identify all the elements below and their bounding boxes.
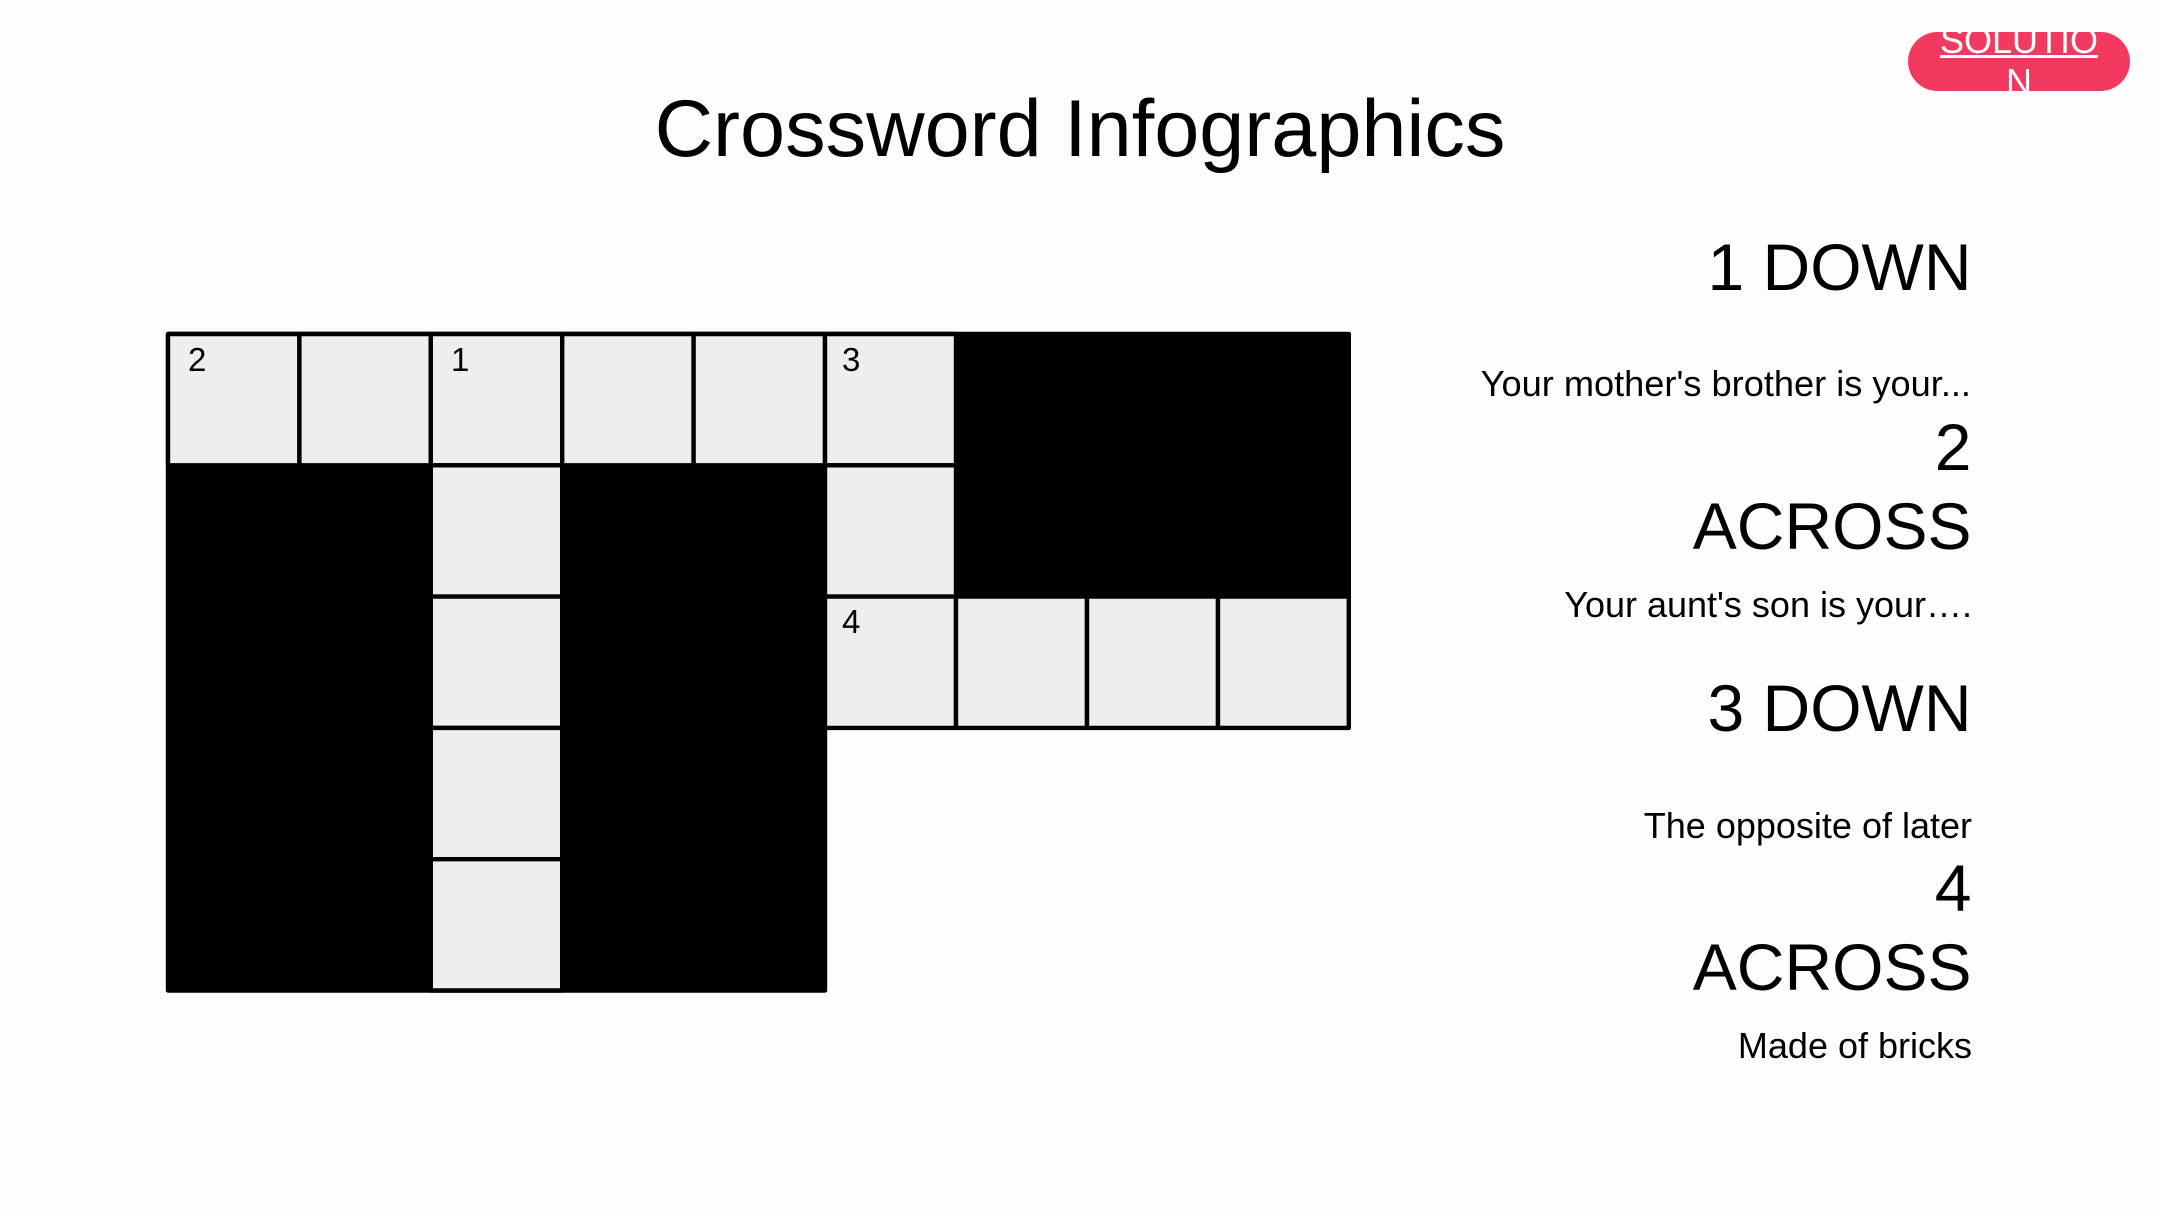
clue heading: 4 across: 4 [1935,850,1972,924]
clue heading: 4 across [1692,850,1972,1004]
down column 3 cell [825,465,956,597]
black blocked area left [168,334,1349,990]
clue heading: 2 across: 2 [1935,410,1972,484]
clue text: 1 down: Your mother's brother is your... [1481,363,1971,404]
clue heading: 4 across: ACROSS [1693,930,1972,1004]
across row 4 cells [825,597,1349,728]
across row 1 cells [168,334,956,465]
clue text: 3 down: The opposite of later [1644,804,1972,846]
clue heading: 2 across [1692,410,1972,562]
clue heading: 3 down: 3 DOWN [1708,671,1972,745]
clue heading: 2 across: ACROSS [1693,488,1972,562]
clue text: 4 across: Made of bricks [1738,1025,1972,1066]
cell number 3: 3 [842,341,860,378]
cell number 2: 2 [188,341,206,378]
clue heading: 1 down: 1 DOWN [1708,230,1972,304]
title: Crossword Infographics [655,84,1505,174]
cell number 1: 1 [451,341,469,378]
cell number 4: 4 [842,603,860,640]
down column 1 cells [431,465,562,990]
clue text: 2 across: Your aunt's son is your…. [1564,584,1972,625]
